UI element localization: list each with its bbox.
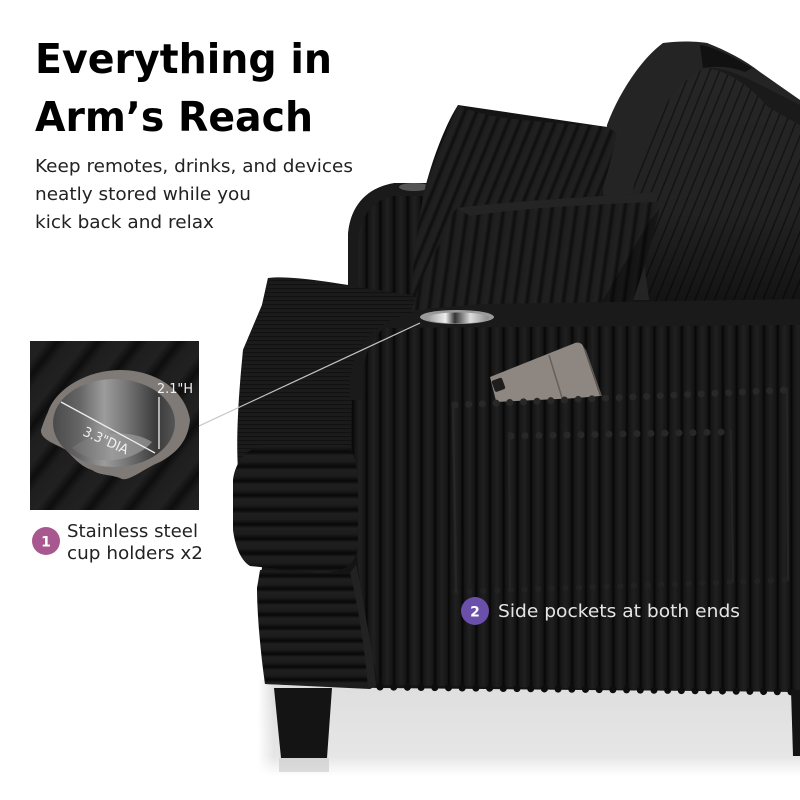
side pocket inner	[509, 430, 733, 590]
arm bottom scallops	[380, 687, 800, 692]
sofa leg right	[791, 690, 800, 756]
inset fabric background	[30, 341, 199, 510]
cup rim	[41, 370, 190, 479]
description: neatly stored while you	[35, 185, 251, 205]
cup floor	[72, 433, 152, 460]
title	[35, 35, 332, 141]
callout 1: cup holders: cup holders x2	[67, 544, 203, 564]
label diameter: 3.3"DIA	[80, 424, 131, 458]
far arm with cup holder	[348, 183, 429, 296]
callout 1: cup holders: 1	[41, 534, 51, 550]
title: Everything in	[35, 35, 332, 83]
tablet in pocket	[490, 343, 602, 405]
front lumbar pillow	[412, 192, 659, 310]
cup inner steel	[53, 379, 175, 467]
description	[35, 157, 353, 233]
back square pillow	[412, 105, 617, 300]
callout 1: cup holders	[32, 522, 203, 564]
side pocket outer	[453, 388, 788, 592]
leg shadow	[279, 758, 329, 772]
callout 2: side pockets	[461, 597, 740, 625]
callout 2: side pockets: Side pockets at both ends	[498, 602, 740, 622]
front arm roll	[233, 445, 358, 573]
sofa leg left	[274, 688, 332, 758]
front back cushion	[633, 68, 800, 305]
rear cushion top seam	[700, 45, 752, 72]
floor shadow	[258, 680, 800, 776]
lower front panel	[257, 565, 376, 689]
seat cushion	[237, 277, 420, 470]
callout 2: side pockets: 2	[470, 604, 480, 620]
sofa base silhouette	[240, 43, 800, 692]
rear back cushion	[600, 42, 800, 300]
leader line	[199, 323, 420, 426]
sofa illustration	[233, 42, 800, 758]
cup holder on arm	[420, 310, 494, 324]
description: Keep remotes, drinks, and devices	[35, 157, 353, 177]
description: kick back and relax	[35, 213, 214, 233]
arm top band	[350, 299, 800, 400]
title: Arm’s Reach	[35, 93, 313, 141]
label height: 2.1"H	[157, 381, 193, 397]
callout 1: cup holders: Stainless steel	[67, 522, 198, 542]
arm side panel	[351, 299, 800, 692]
height line	[158, 397, 160, 449]
inset photo: cup holder	[30, 341, 199, 510]
diameter line	[61, 402, 155, 453]
